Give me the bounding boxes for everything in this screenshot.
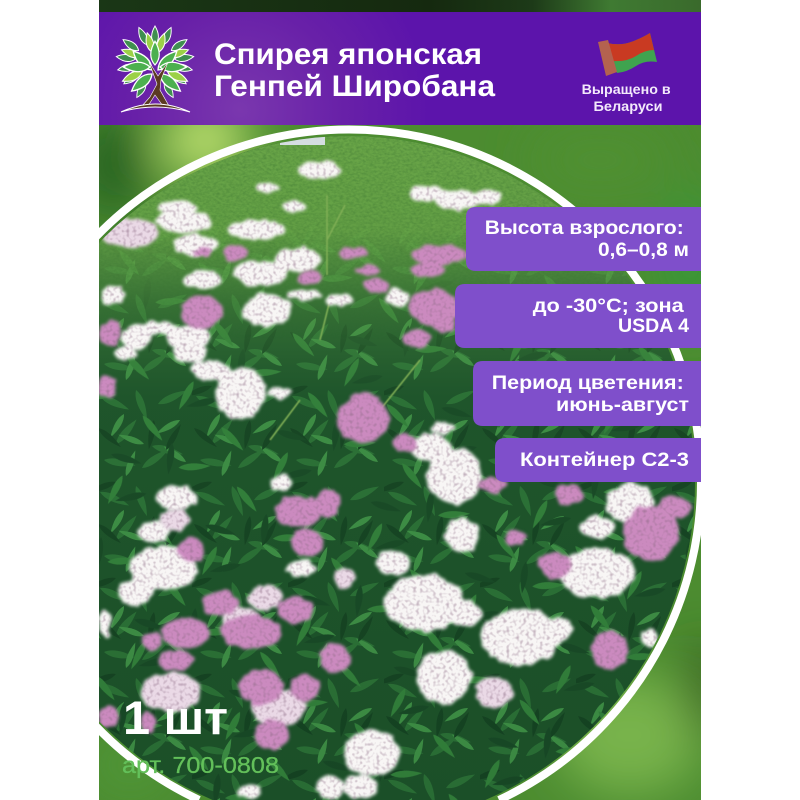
tag: frost hardiness — [455, 284, 701, 348]
tag: container size — [495, 438, 701, 482]
quantity label: 1 шт — [123, 691, 228, 744]
caption: grown in Belarus: Выращено в — [582, 82, 671, 97]
white blossoms — [99, 161, 659, 799]
photo foliage and blossoms — [98, 120, 701, 800]
pale pink blossoms — [102, 218, 512, 728]
shrub stems — [270, 195, 420, 440]
header banner — [99, 12, 701, 125]
tag: flowering period — [473, 361, 701, 426]
article number: арт. 700-0808 — [122, 752, 279, 778]
tag: container size: Контейнер C2-3 — [520, 450, 689, 471]
tree trunk and ground — [142, 62, 169, 106]
pink blossoms — [98, 245, 691, 750]
tree canopy — [116, 26, 194, 99]
tag: adult height — [466, 207, 701, 271]
title: Спирея японская — [214, 38, 482, 71]
tag: frost hardiness: USDA 4 — [618, 316, 689, 337]
tag: adult height: Высота взрослого: — [485, 218, 684, 239]
photo: flowering spirea shrub in a white-ringed circle — [99, 126, 701, 800]
caption: grown in Belarus: Беларуси — [594, 99, 662, 114]
tag: flowering period: Период цветения: — [492, 373, 684, 394]
logo: tree — [116, 26, 194, 112]
tag: frost hardiness: до -30°C; зона — [533, 296, 684, 317]
title: Генпей Широбана — [214, 70, 495, 103]
icon: flag of Belarus — [598, 33, 657, 76]
tag: adult height: 0,6–0,8 м — [598, 240, 689, 261]
tag: flowering period: июнь-август — [556, 395, 689, 416]
white ring — [99, 126, 701, 800]
